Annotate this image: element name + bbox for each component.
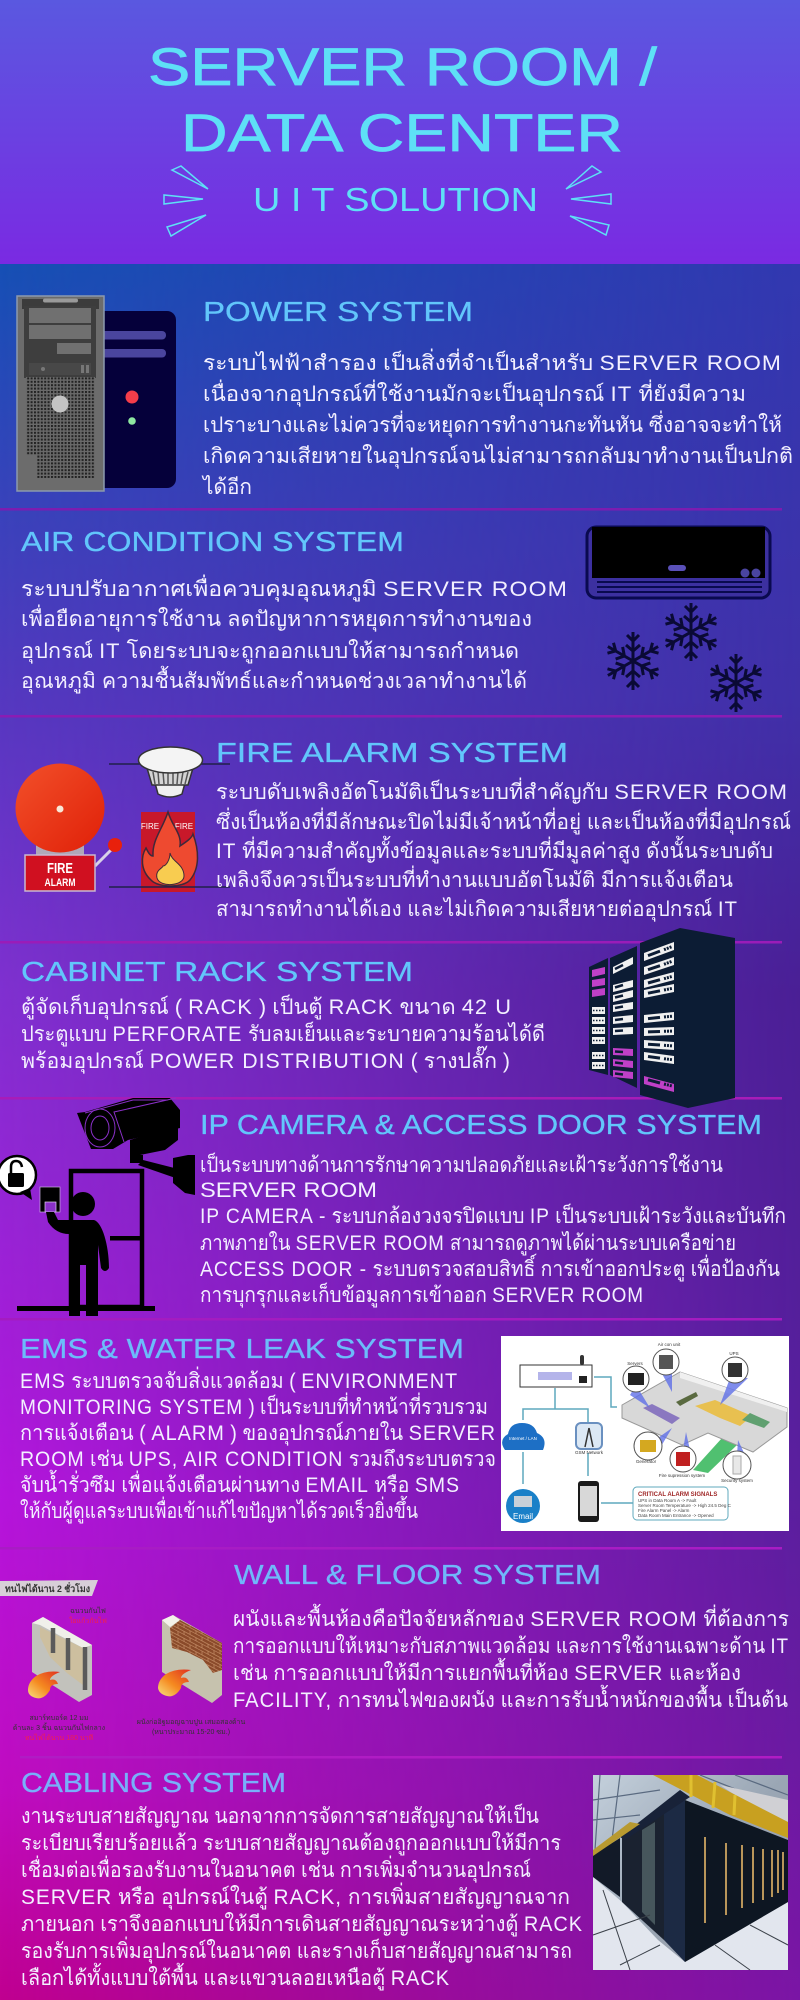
text block: เนื่องจากอุปกรณ์ที่ใช้งานมักจะเป็นอุปกรณ์ IT ที่ยังมีความ	[203, 379, 746, 407]
panel: ip camera and access door system	[0, 1098, 786, 1316]
icon: camera, door and person	[0, 1098, 195, 1316]
callout circles	[623, 1349, 751, 1479]
diagram: monitoring system: Security system	[721, 1478, 753, 1483]
text block: สามารถทำงานได้เอง และไม่เกิดความเสียหายต่ออุปกรณ์ IT	[216, 897, 738, 922]
text block: พร้อมอุปกรณ์ POWER DISTRIBUTION ( รางปลั๊ก )	[21, 1045, 510, 1074]
icon: fire alarm bell	[16, 764, 122, 891]
text block: ภายนอก เราจึงออกแบบให้มีการเดินสายสัญญาณระหว่างตู้ RACK	[21, 1912, 583, 1937]
icon: fire call box with flame: FIRE	[175, 822, 193, 831]
diagram: monitoring system: Fire Alarm Panel -> Alarm	[638, 1508, 690, 1513]
text block: เกิดความเสียหายในอุปกรณ์จนไม่สามารถกลับมาทำงานเป็นปกติ	[203, 442, 793, 469]
diagram: monitoring system: Internet / LAN	[509, 1436, 537, 1441]
text block: เพื่อยืดอายุการใช้งาน ลดปัญหาการหยุดการทำงานของ	[21, 604, 532, 632]
icon: snowflakes	[604, 603, 765, 712]
heading: CABLING SYSTEM	[21, 1767, 286, 1798]
icon: air conditioner	[587, 527, 770, 598]
panel: cabling system	[21, 1767, 788, 1991]
header background	[0, 0, 800, 264]
heading: IP CAMERA & ACCESS DOOR SYSTEM	[200, 1109, 762, 1140]
panel: cabinet rack system	[21, 956, 545, 1074]
title: SERVER ROOM /	[148, 38, 657, 97]
text block: ระบบดับเพลิงอัตโนมัติเป็นระบบที่สำคัญกับ SERVER ROOM	[216, 777, 788, 804]
text block: งานระบบสายสัญญาณ นอกจากการจัดการสายสัญญาณให้เป็น	[21, 1802, 539, 1828]
panel: ems and water leak system	[20, 1333, 789, 1531]
text block: ระเบียบเรียบร้อยแล้ว ระบบสายสัญญาณต้องถูกออกแบบให้มีการ	[21, 1831, 561, 1856]
diagram: monitoring system: Servers	[627, 1361, 643, 1366]
building	[693, 1438, 737, 1473]
icon: fire alarm bell: FIRE	[47, 860, 73, 877]
icon: wall illustrations: ใยแก้วกันไฟ	[69, 1616, 107, 1625]
panel: fire alarm system	[16, 737, 791, 922]
diagram: monitoring system: UPS	[729, 1351, 739, 1356]
diagram: monitoring system	[501, 1336, 789, 1531]
icon: wall illustrations: ทนไฟได้นาน 2 ชั่วโมง	[5, 1581, 90, 1595]
heading: POWER SYSTEM	[203, 296, 473, 327]
text block: อุปกรณ์ IT โดยระบบจะถูกออกแบบให้สามารถกำหนด	[21, 639, 519, 664]
text block	[233, 1604, 789, 1712]
diagram: monitoring system: Email	[513, 1512, 533, 1521]
photo: data center aisle	[593, 1775, 788, 1970]
diagram: monitoring system: UPS in Data Room A -> Fault	[638, 1498, 697, 1503]
cloud	[502, 1423, 545, 1450]
icon: fire call box with flame	[109, 812, 230, 892]
panel: wall and floor system	[0, 1559, 789, 1742]
icon: server tower and power box	[17, 296, 176, 491]
diagram: monitoring system: GSM Network	[575, 1450, 604, 1455]
text block: ผนังและพื้นห้องคือปัจจัยหลักของ SERVER ROOM ที่ต้องการ	[233, 1604, 789, 1631]
text block: การบุกรุกและเก็บข้อมูลการเข้าออก SERVER ROOM	[200, 1281, 644, 1308]
text block: อุณหภูมิ ความชื้นสัมพัทธ์และกำหนดช่วงเวลาทำงานได้	[21, 666, 527, 694]
diagram: monitoring system: Data Room Main Entrance -> Opened	[638, 1513, 714, 1518]
icon: smoke detector	[109, 747, 230, 797]
text block: รองรับการเพิ่มอุปกรณ์ในอนาคต และรางเก็บสายสัญญาณสามารถ	[21, 1936, 572, 1964]
panel: air condition system	[21, 526, 770, 712]
text block: ตู้จัดเก็บอุปกรณ์ ( RACK ) เป็นตู้ RACK ขนาด 42 U	[21, 993, 512, 1020]
icon: fire alarm bell: ALARM	[44, 877, 76, 889]
text block: ระบบไฟฟ้าสำรอง เป็นสิ่งที่จำเป็นสำหรับ SERVER ROOM	[203, 348, 782, 375]
text block: ประตูแบบ PERFORATE รับลมเย็นและระบายความร้อนได้ดี	[21, 1020, 545, 1047]
icon: wall illustrations: สมาร์ทบอร์ด 12 มม	[29, 1714, 89, 1722]
blue beams	[630, 1370, 748, 1455]
subtitle: U I T SOLUTION	[253, 181, 538, 218]
diagram: monitoring system: Server Room Temperature -> High 24.5 Deg C	[638, 1503, 732, 1508]
text block: FACILITY, การทนไฟของผนัง และการรับน้ำหนักของพื้น เป็นต้น	[233, 1685, 788, 1712]
diagram: monitoring system: Air con unit	[658, 1342, 681, 1347]
text block: ROOM เช่น UPS, AIR CONDITION รวมถึงระบบตรวจ	[20, 1448, 496, 1471]
text block: เลือกได้ทั้งแบบใต้พื้น และแขวนลอยเหนือตู้ RACK	[21, 1963, 450, 1991]
text block: ภาพภายใน SERVER ROOM สามารถดูภาพได้ผ่านระบบเครือข่าย	[200, 1231, 736, 1256]
icon: wall illustrations: ผนังก่ออิฐมอญฉาบปูน เสมอสองด้าน	[137, 1718, 245, 1726]
icon: server racks	[589, 928, 735, 1108]
text block: ให้กับผู้ดูแลระบบเพื่อเข้าแก้ไขปัญหาได้รวดเร็วยิ่งขึ้น	[20, 1496, 418, 1524]
diagram: monitoring system: Fire supression system	[659, 1473, 705, 1478]
text block: เปราะบางและไม่ควรที่จะหยุดการทำงานกะทันหัน ซึ่งอาจจะทำให้	[203, 410, 782, 438]
heading: CABINET RACK SYSTEM	[21, 956, 413, 987]
icon: wall illustrations: ทนไฟได้นาน 180 นาที	[25, 1733, 94, 1742]
text block: เป็นระบบทางด้านการรักษาความปลอดภัยและเฝ้าระวังการใช้งาน	[200, 1151, 723, 1177]
text block: IT ที่มีความสำคัญทั้งข้อมูลและระบบที่มีมูลค่าสูง ดังนั้นระบบดับ	[216, 836, 773, 864]
title	[148, 38, 657, 163]
diagram: monitoring system: CRITICAL ALARM SIGNALS	[638, 1492, 717, 1498]
heading: FIRE ALARM SYSTEM	[216, 737, 568, 768]
text block: เชื่อมต่อเพื่อรองรับงานในอนาคต เช่น การเพิ่มจำนวนอุปกรณ์	[21, 1855, 531, 1883]
text block	[21, 574, 568, 694]
text block	[20, 1366, 496, 1524]
text block: ซึ่งเป็นห้องที่มีลักษณะปิดไม่มีเจ้าหน้าที่อยู่ และเป็นห้องที่มีอุปกรณ์	[216, 807, 791, 835]
text block	[200, 1151, 786, 1308]
text block: ได้อีก	[201, 475, 252, 499]
text block: ระบบปรับอากาศเพื่อควบคุมอุณหภูมิ SERVER ROOM	[21, 574, 568, 602]
icon: wall illustrations	[0, 1580, 245, 1742]
text block: EMS ระบบตรวจจับสิ่งแวดล้อม ( ENVIRONMENT	[20, 1366, 458, 1393]
text block	[21, 1802, 583, 1991]
text block: IP CAMERA - ระบบกล้องวงจรปิดแบบ IP เป็นระบบเฝ้าระวังและบันทึก	[200, 1202, 786, 1228]
text block: จับน้ำรั่วซึม เพื่อแจ้งเตือนผ่านทาง EMAIL หรือ SMS	[20, 1470, 460, 1497]
icon: fire call box with flame: FIRE	[141, 822, 159, 831]
heading: AIR CONDITION SYSTEM	[21, 526, 404, 557]
text block	[21, 993, 545, 1074]
heading: EMS & WATER LEAK SYSTEM	[20, 1333, 464, 1364]
title: DATA CENTER	[181, 104, 623, 163]
text block: ACCESS DOOR - ระบบตรวจสอบสิทธิ์ การเข้าออกประตู เพื่อป้องกัน	[200, 1253, 780, 1282]
text block: SERVER หรือ อุปกรณ์ในตู้ RACK, การเพิ่มสายสัญญาณจาก	[21, 1882, 570, 1910]
panel: power system	[17, 296, 793, 499]
icon: bursts around subtitle	[164, 166, 611, 236]
text block: SERVER ROOM	[200, 1179, 377, 1202]
icon: wall illustrations: ด้านละ 3 ชิ้น ฉนวนกันไฟกลาง	[13, 1721, 105, 1732]
icon: wall illustrations: ฉนวนกันไฟ	[70, 1606, 106, 1615]
text block: เพลิงจึงควรเป็นระบบที่ทำงานแบบอัตโนมัติ มีการแจ้งเตือน	[216, 865, 733, 892]
icon: wall illustrations: (หนาประมาณ 15-20 ซม.)	[152, 1729, 230, 1736]
text block: MONITORING SYSTEM ) เป็นระบบที่ทำหน้าที่รวบรวม	[20, 1392, 488, 1419]
text block: การแจ้งเตือน ( ALARM ) ของอุปกรณ์ภายใน SERVER	[20, 1421, 496, 1446]
text block	[216, 777, 791, 922]
text block: เช่น การออกแบบให้มีการแยกพื้นที่ห้อง SERVER และห้อง	[233, 1658, 741, 1685]
text block	[201, 348, 793, 499]
diagram: monitoring system: Generator	[636, 1459, 657, 1464]
heading: WALL & FLOOR SYSTEM	[234, 1559, 601, 1590]
